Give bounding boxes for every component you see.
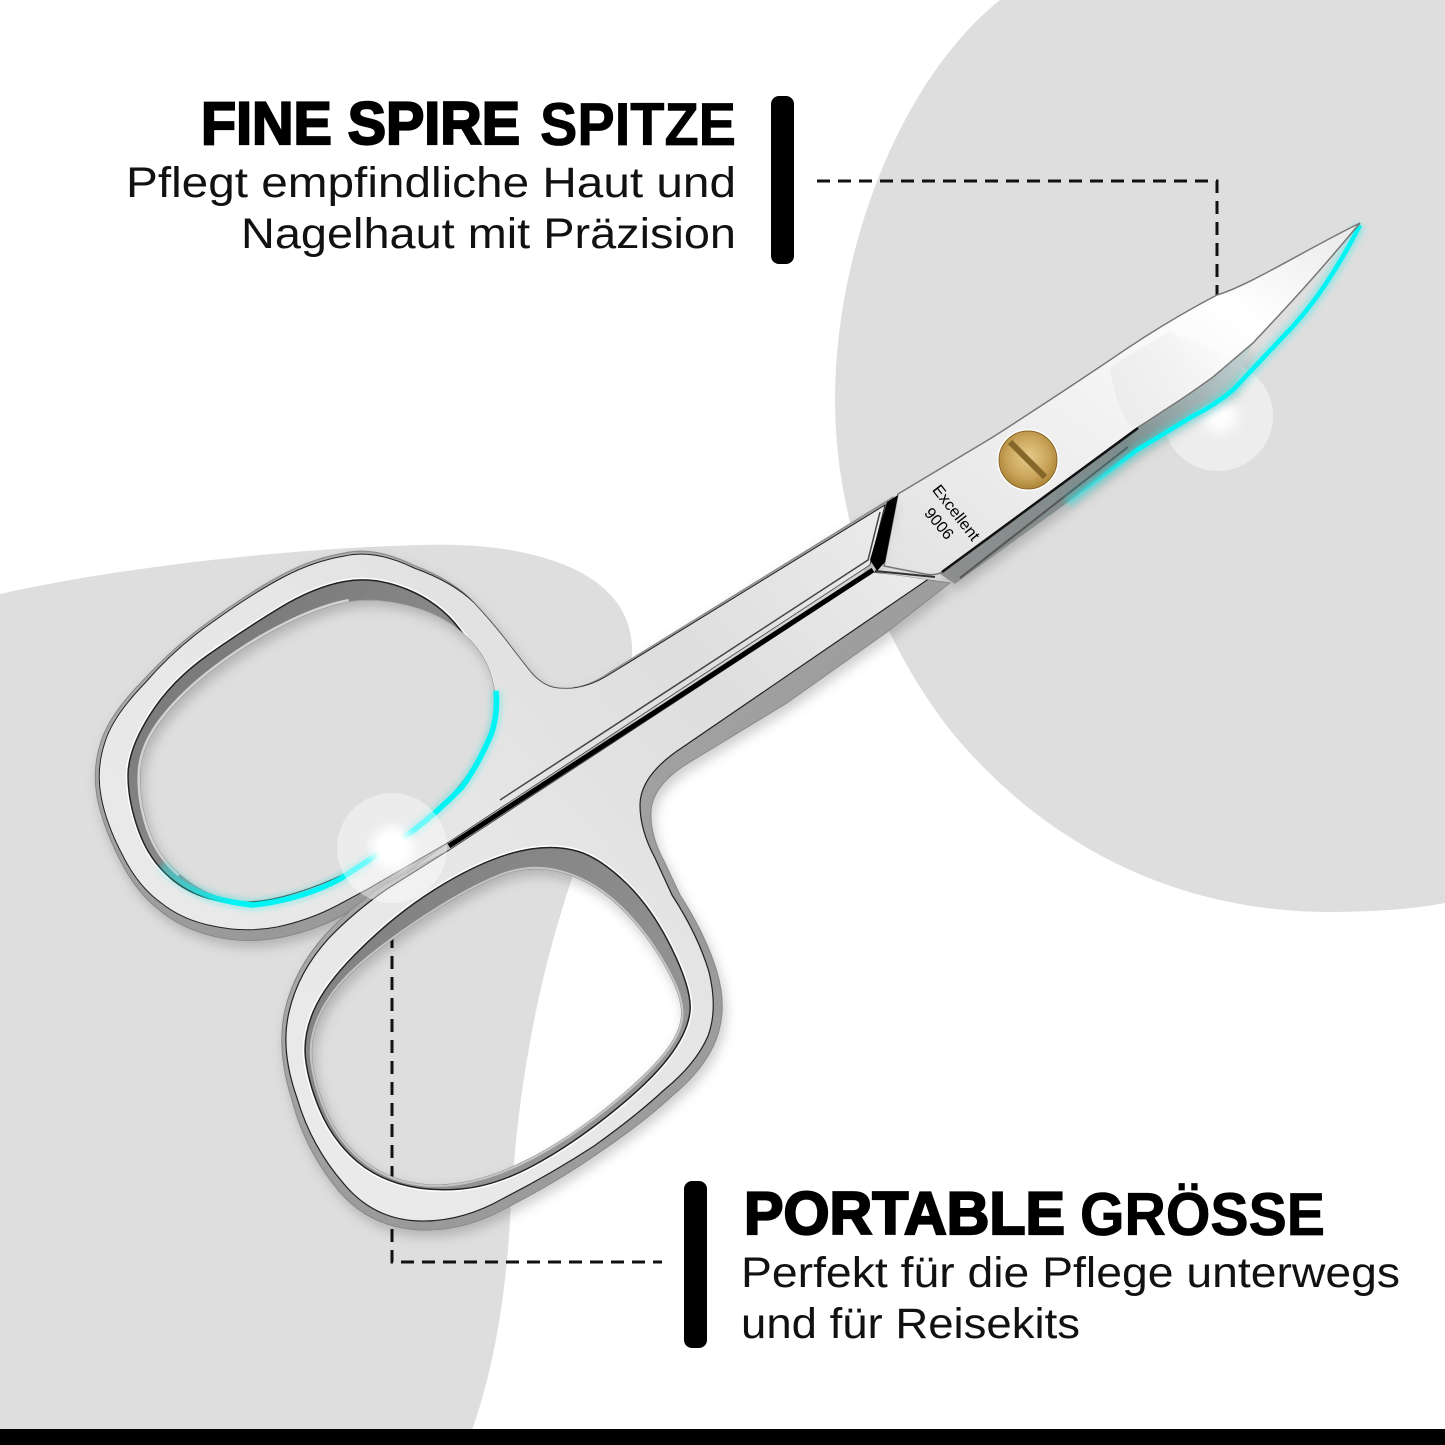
bottom black bar — [0, 1429, 1445, 1445]
text block: portable description — [741, 1249, 1400, 1348]
satin patch on blade — [1110, 332, 1235, 426]
cyan edge on blade — [1067, 225, 1360, 503]
callout: fine spire tip — [126, 90, 794, 264]
heading: fine spire spitze: SPITZE — [540, 91, 736, 158]
lower handle face and bevel — [286, 572, 930, 1221]
blade inner black edge — [942, 428, 1138, 572]
dashed leader to handle — [392, 935, 662, 1262]
text block: tip description — [126, 159, 736, 258]
glow spot on blade — [1163, 361, 1273, 471]
blade strip lines — [960, 447, 1128, 578]
dashed leader to tip — [817, 181, 1217, 297]
text block: portable description: und für Reisekits — [741, 1300, 1080, 1348]
heading: portable groesse: PORTABLE — [744, 1180, 1065, 1247]
lower handle — [282, 572, 950, 1230]
heading: fine spire spitze — [201, 90, 736, 158]
screw — [997, 429, 1059, 491]
cyan edge on handle — [162, 691, 496, 905]
scissors — [95, 223, 1360, 1230]
engraving: Excellent — [929, 482, 983, 545]
upper handle face and bevel — [99, 505, 885, 930]
accent bar bottom — [684, 1181, 707, 1348]
upper arm facet line — [500, 512, 880, 800]
text block: tip description: Nagelhaut mit Präzision — [241, 210, 736, 258]
callout: portable size — [684, 1180, 1400, 1348]
upper handle — [95, 497, 893, 941]
text block: tip description: Pflegt empfindliche Haut und — [126, 159, 736, 207]
heading: portable groesse: GRÖSSE — [1080, 1181, 1325, 1248]
engraving: 9006 — [920, 505, 956, 543]
glow spot on handle — [337, 793, 447, 903]
heading: fine spire spitze: FINE SPIRE — [201, 90, 520, 157]
background: grey blob lower left — [0, 545, 632, 1430]
background: grey circle top right — [835, 0, 1445, 912]
text block: portable description: Perfekt für die Pflege unterwegs — [741, 1249, 1400, 1297]
lower blade strip — [937, 343, 1253, 584]
heading: portable groesse — [744, 1180, 1325, 1248]
upper blade — [884, 223, 1360, 575]
accent bar top — [771, 96, 794, 264]
centre slit and notch — [449, 495, 935, 846]
